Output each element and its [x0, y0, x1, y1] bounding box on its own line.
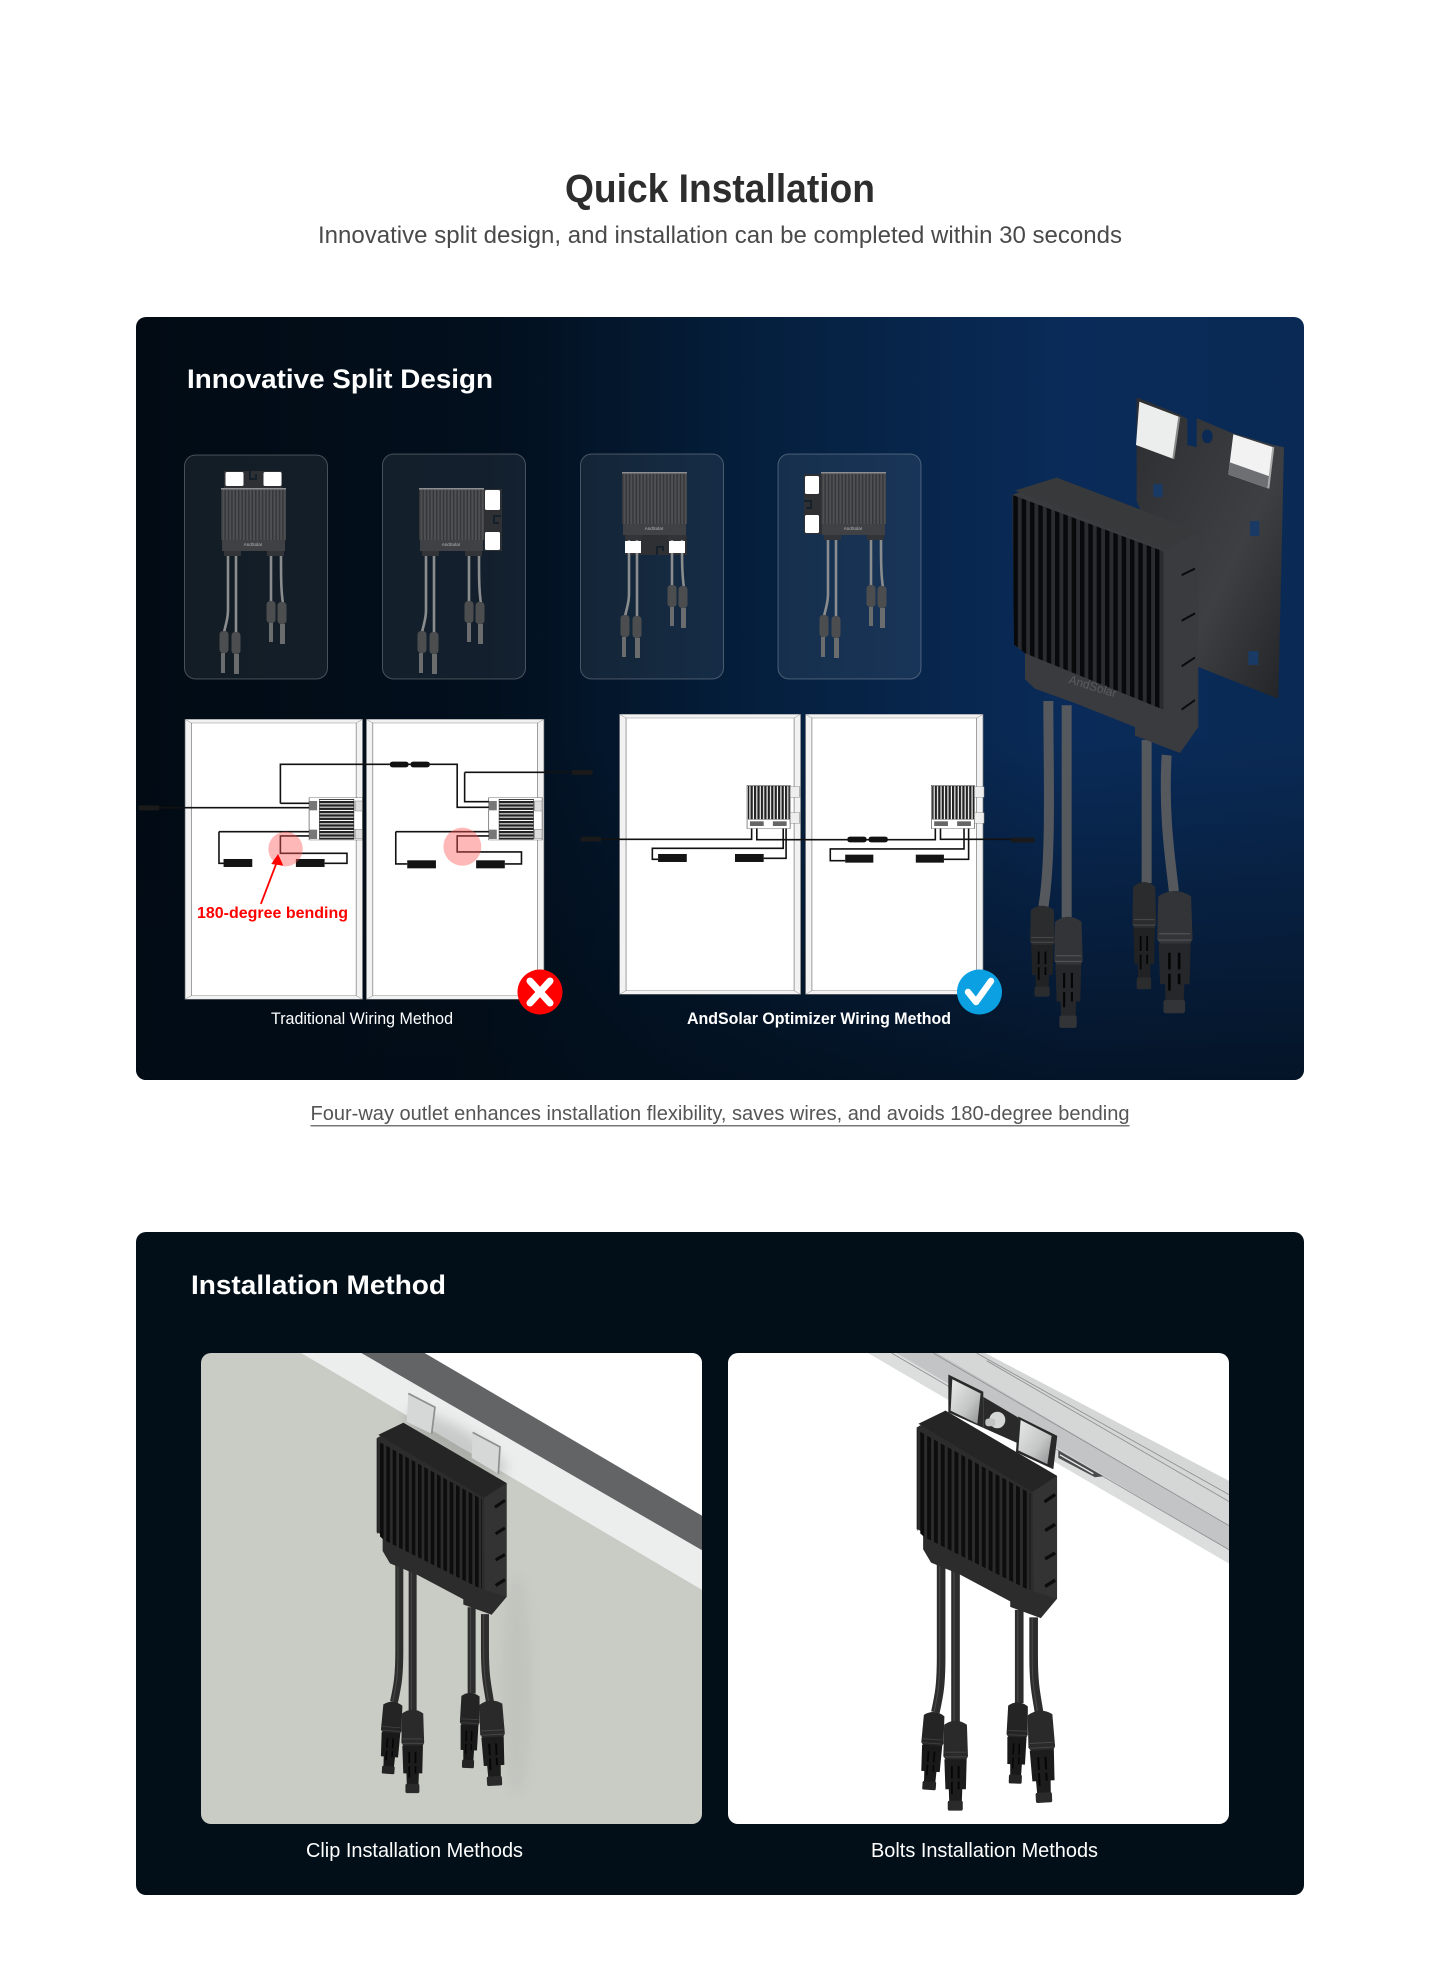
caption: clip installation methods: Clip Installation Methods [306, 1839, 523, 1862]
label on product: AndSolar [1067, 672, 1118, 700]
card 4: clips on left: AndSolar [844, 526, 863, 531]
card 1: clips on top [184, 455, 328, 679]
icon: blue check [957, 970, 1002, 1014]
card 3: clips on bottom: AndSolar [645, 526, 664, 531]
heading: innovative split design: Innovative Split Design [187, 364, 493, 394]
product: optimizer with mounting plate [1012, 397, 1284, 1028]
caption: four-way outlet: Four-way outlet enhances installation flexibility, saves wires, and avoids 180-degree bending [310, 1103, 1130, 1125]
panel: innovative split design [136, 317, 1304, 1080]
heading: installation method: Installation Method [191, 1270, 446, 1300]
caption: traditional wiring method: Traditional Wiring Method [271, 1009, 453, 1028]
diagram: traditional wiring [139, 719, 593, 999]
label: 180-degree bending: 180-degree bending [197, 905, 348, 922]
icon: red cross [518, 970, 562, 1014]
card 4: clips on left [778, 454, 921, 679]
caption: andsolar optimizer wiring method: AndSolar Optimizer Wiring Method [687, 1009, 951, 1028]
diagram: andsolar optimizer wiring [581, 714, 1035, 994]
title: Quick Installation [565, 167, 875, 211]
photo: clip installation [201, 1350, 703, 1824]
panel: installation method [136, 1232, 1304, 1895]
card 1: clips on top: AndSolar [244, 542, 263, 547]
card 2: clips on right: AndSolar [442, 542, 461, 547]
photo: bolts installation [728, 1350, 1230, 1824]
card 2: clips on right [382, 454, 526, 679]
caption: bolts installation methods: Bolts Installation Methods [871, 1839, 1098, 1862]
card 3: clips on bottom [580, 454, 724, 679]
subtitle: Innovative split design, and installation can be completed within 30 seconds [318, 222, 1122, 249]
